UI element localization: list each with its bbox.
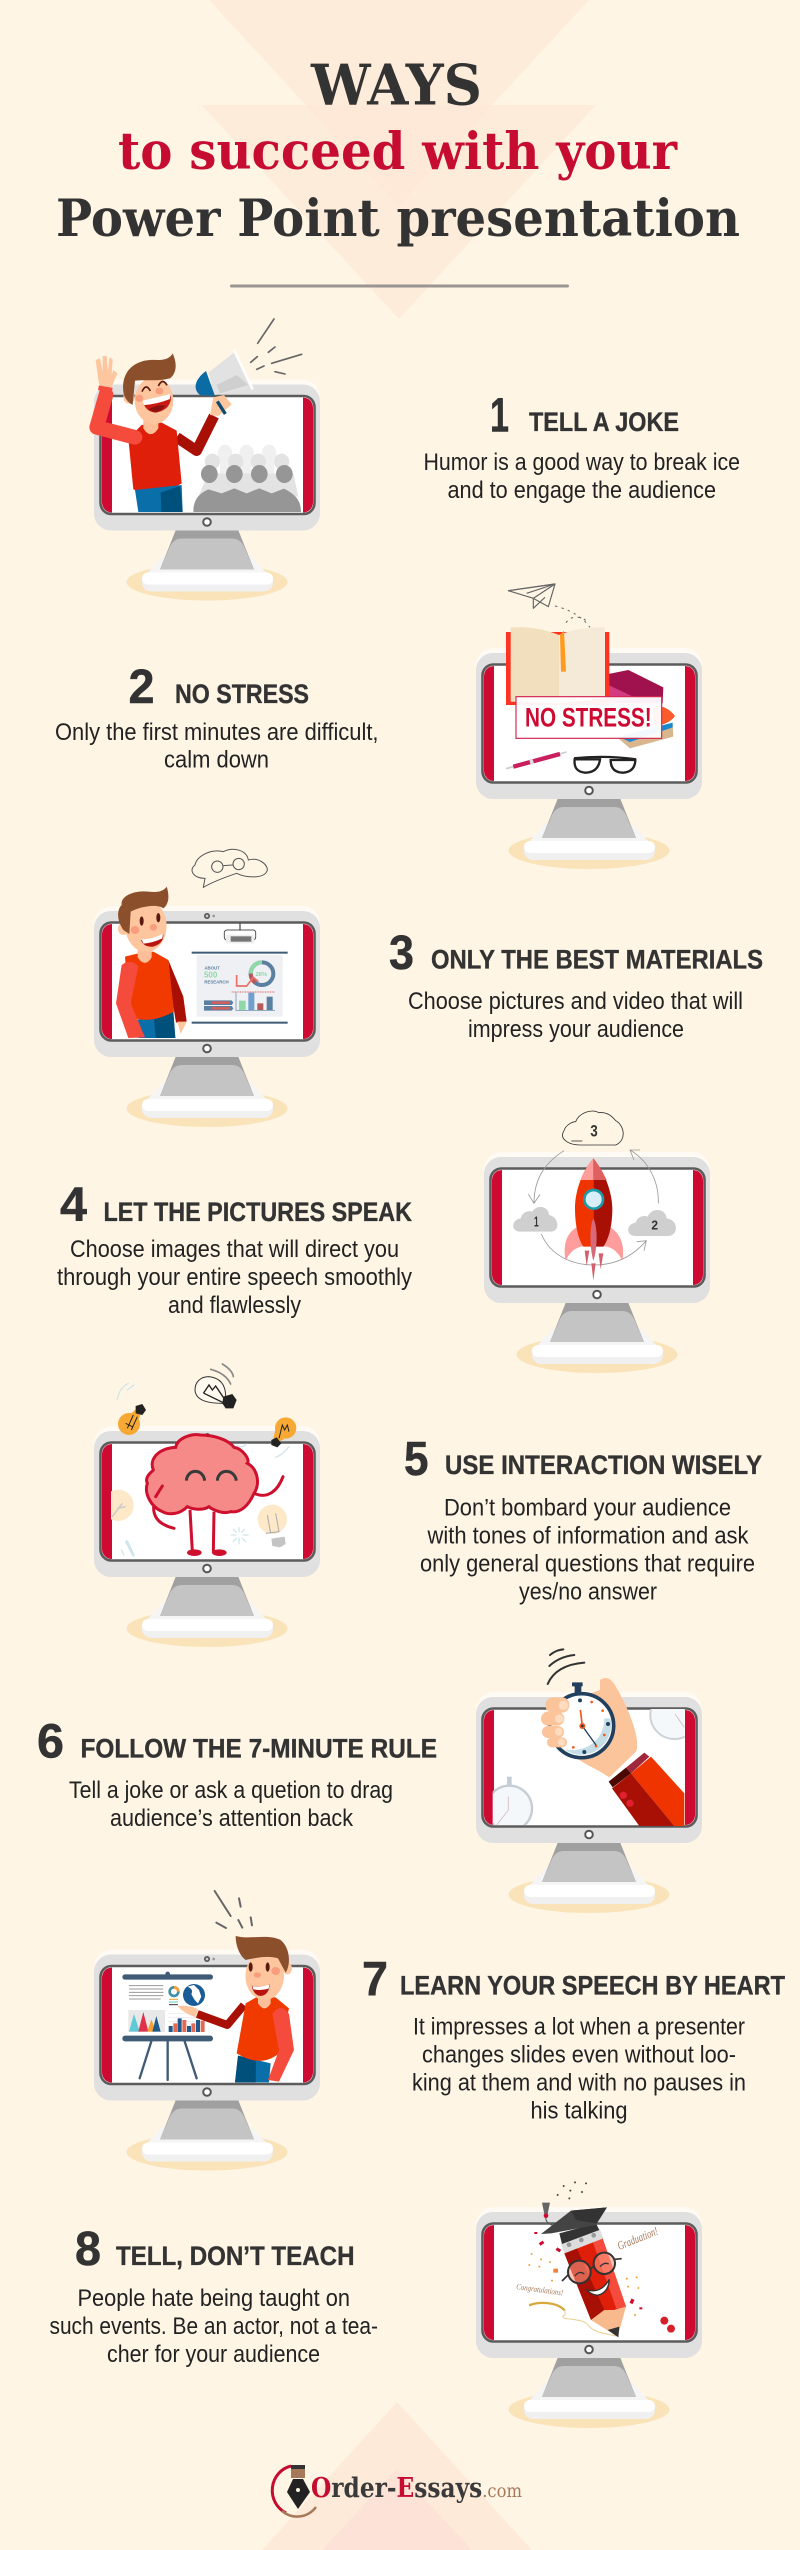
text 1: and to engage the audience [448, 477, 716, 504]
illustration: presenter with projector screen [116, 849, 288, 1038]
monitor 4 [484, 1152, 710, 1373]
heading 5 [404, 1433, 762, 1486]
heading 8 [75, 2223, 354, 2276]
text 2: calm down [164, 746, 269, 774]
text 7 [412, 2014, 746, 2124]
heading 3 [389, 927, 763, 980]
section 6: follow the 7-minute rule [37, 1649, 702, 1913]
text 4: and flawlessly [168, 1292, 301, 1319]
monitor 2 [476, 648, 702, 869]
heading 4: 4 [60, 1179, 87, 1232]
script words [516, 2224, 660, 2298]
heading 8: TELL, DON’T TEACH [116, 2241, 354, 2271]
cloud numbers: 3 [590, 1122, 598, 1141]
heading 2: NO STRESS [175, 679, 309, 709]
text 5: yes/no answer [519, 1578, 657, 1606]
cloud numbers: 2 [651, 1217, 658, 1232]
heading 5: 5 [404, 1433, 428, 1486]
text 1: Humor is a good way to break ice [424, 449, 740, 476]
brain character [146, 1435, 283, 1556]
text 4: Choose images that will direct you [70, 1236, 399, 1263]
text 8 [50, 2285, 378, 2368]
heading 3: 3 [389, 927, 414, 980]
section 4: let the pictures speak [57, 1111, 710, 1373]
text 4: through your entire speech smoothly [57, 1264, 412, 1291]
cloud numbers: 1 [534, 1215, 539, 1231]
heading 4: LET THE PICTURES SPEAK [104, 1197, 412, 1227]
script words: Graduation! [615, 2224, 660, 2253]
heading 1 [490, 390, 679, 442]
section 1: tell a joke [94, 319, 740, 600]
title [56, 52, 740, 249]
illustration: rocket with clouds cycle [513, 1111, 676, 1281]
section 5: use interaction wisely [94, 1364, 762, 1647]
section 8: tell, don't teach [50, 2181, 702, 2428]
heading 6: 6 [37, 1716, 64, 1768]
small slide text: 500 [204, 971, 218, 980]
script words: Congratulations! [516, 2282, 564, 2298]
background triangles: bottom [262, 2402, 532, 2550]
small slide text: 28% [256, 972, 267, 978]
text 7: It impresses a lot when a presenter [413, 2014, 745, 2040]
cloud numbers [534, 1122, 658, 1232]
heading 6 [37, 1716, 437, 1768]
monitor 1 [94, 380, 320, 600]
text 5: only general questions that require [420, 1550, 755, 1578]
text 8: cher for your audience [107, 2341, 320, 2368]
monitor 8 [476, 2207, 702, 2428]
monitor 6 [476, 1692, 702, 1913]
title: to succeed with your [118, 122, 678, 182]
icon: pen nib in ring [272, 2465, 316, 2517]
icon: outline bulb [195, 1364, 237, 1408]
text 6: audience’s attention back [110, 1805, 354, 1832]
illustration: presenter pointing at flip chart [122, 1891, 294, 2082]
monitor 3 [94, 906, 320, 1127]
text 1 [424, 449, 740, 504]
heading 4 [60, 1179, 412, 1232]
text 5 [420, 1494, 755, 1606]
text 2: Only the first minutes are difficult, [55, 719, 378, 746]
heading 7 [362, 1954, 785, 2006]
heading 8: 8 [75, 2223, 101, 2276]
text 5: Don’t bombard your audience [444, 1494, 731, 1522]
text 6 [69, 1777, 393, 1832]
logo wordmark: Order-Essays.com [311, 2473, 522, 2504]
title: WAYS [310, 52, 482, 118]
heading 1: TELL A JOKE [529, 407, 679, 437]
small slide text [204, 965, 267, 984]
monitor 7 [94, 1950, 320, 2170]
title: Power Point presentation [56, 189, 740, 249]
monitor 5 [94, 1426, 320, 1647]
illustration: brain character with light bulbs [102, 1364, 296, 1556]
text 7: changes slides even without loo- [422, 2042, 736, 2068]
heading 2: 2 [128, 661, 154, 714]
text 3 [408, 988, 743, 1043]
text 5: with tones of information and ask [427, 1522, 749, 1550]
illustration: graduation pencil character [516, 2181, 675, 2337]
text 7: king at them and with no pauses in [412, 2070, 746, 2096]
text 6: Tell a joke or ask a quetion to drag [69, 1777, 393, 1804]
text 3: impress your audience [468, 1016, 684, 1043]
text 2 [55, 719, 378, 774]
illustration: man with megaphone and audience [96, 319, 302, 512]
background triangles: top [202, 0, 596, 319]
heading 7: 7 [362, 1954, 388, 2006]
heading 2 [128, 661, 309, 714]
section 3: only the best materials [94, 849, 763, 1127]
illustration: books, no stress label, pen, glasses [506, 584, 675, 773]
small slide text: RESEARCH [204, 979, 229, 984]
heading 5: USE INTERACTION WISELY [445, 1450, 762, 1480]
illustration: hand holding stopwatch [492, 1648, 685, 1826]
label: no stress [516, 697, 662, 738]
small slide text: ABOUT [204, 965, 220, 970]
text 8: such events. Be an actor, not a tea- [50, 2313, 378, 2340]
text 3: Choose pictures and video that will [408, 988, 743, 1015]
logo: Order-Essays.com [272, 2465, 522, 2517]
text 7: his talking [530, 2098, 628, 2124]
text 8: People hate being taught on [78, 2285, 350, 2312]
icon: orange bulbs [118, 1404, 296, 1447]
label: no stress: NO STRESS! [525, 703, 652, 733]
heading 6: FOLLOW THE 7-MINUTE RULE [80, 1734, 437, 1764]
heading 3: ONLY THE BEST MATERIALS [431, 944, 763, 974]
section 2: no stress [55, 584, 702, 869]
section 7: learn your speech by heart [94, 1891, 785, 2170]
heading 1: 1 [490, 390, 509, 442]
text 4 [57, 1236, 412, 1319]
